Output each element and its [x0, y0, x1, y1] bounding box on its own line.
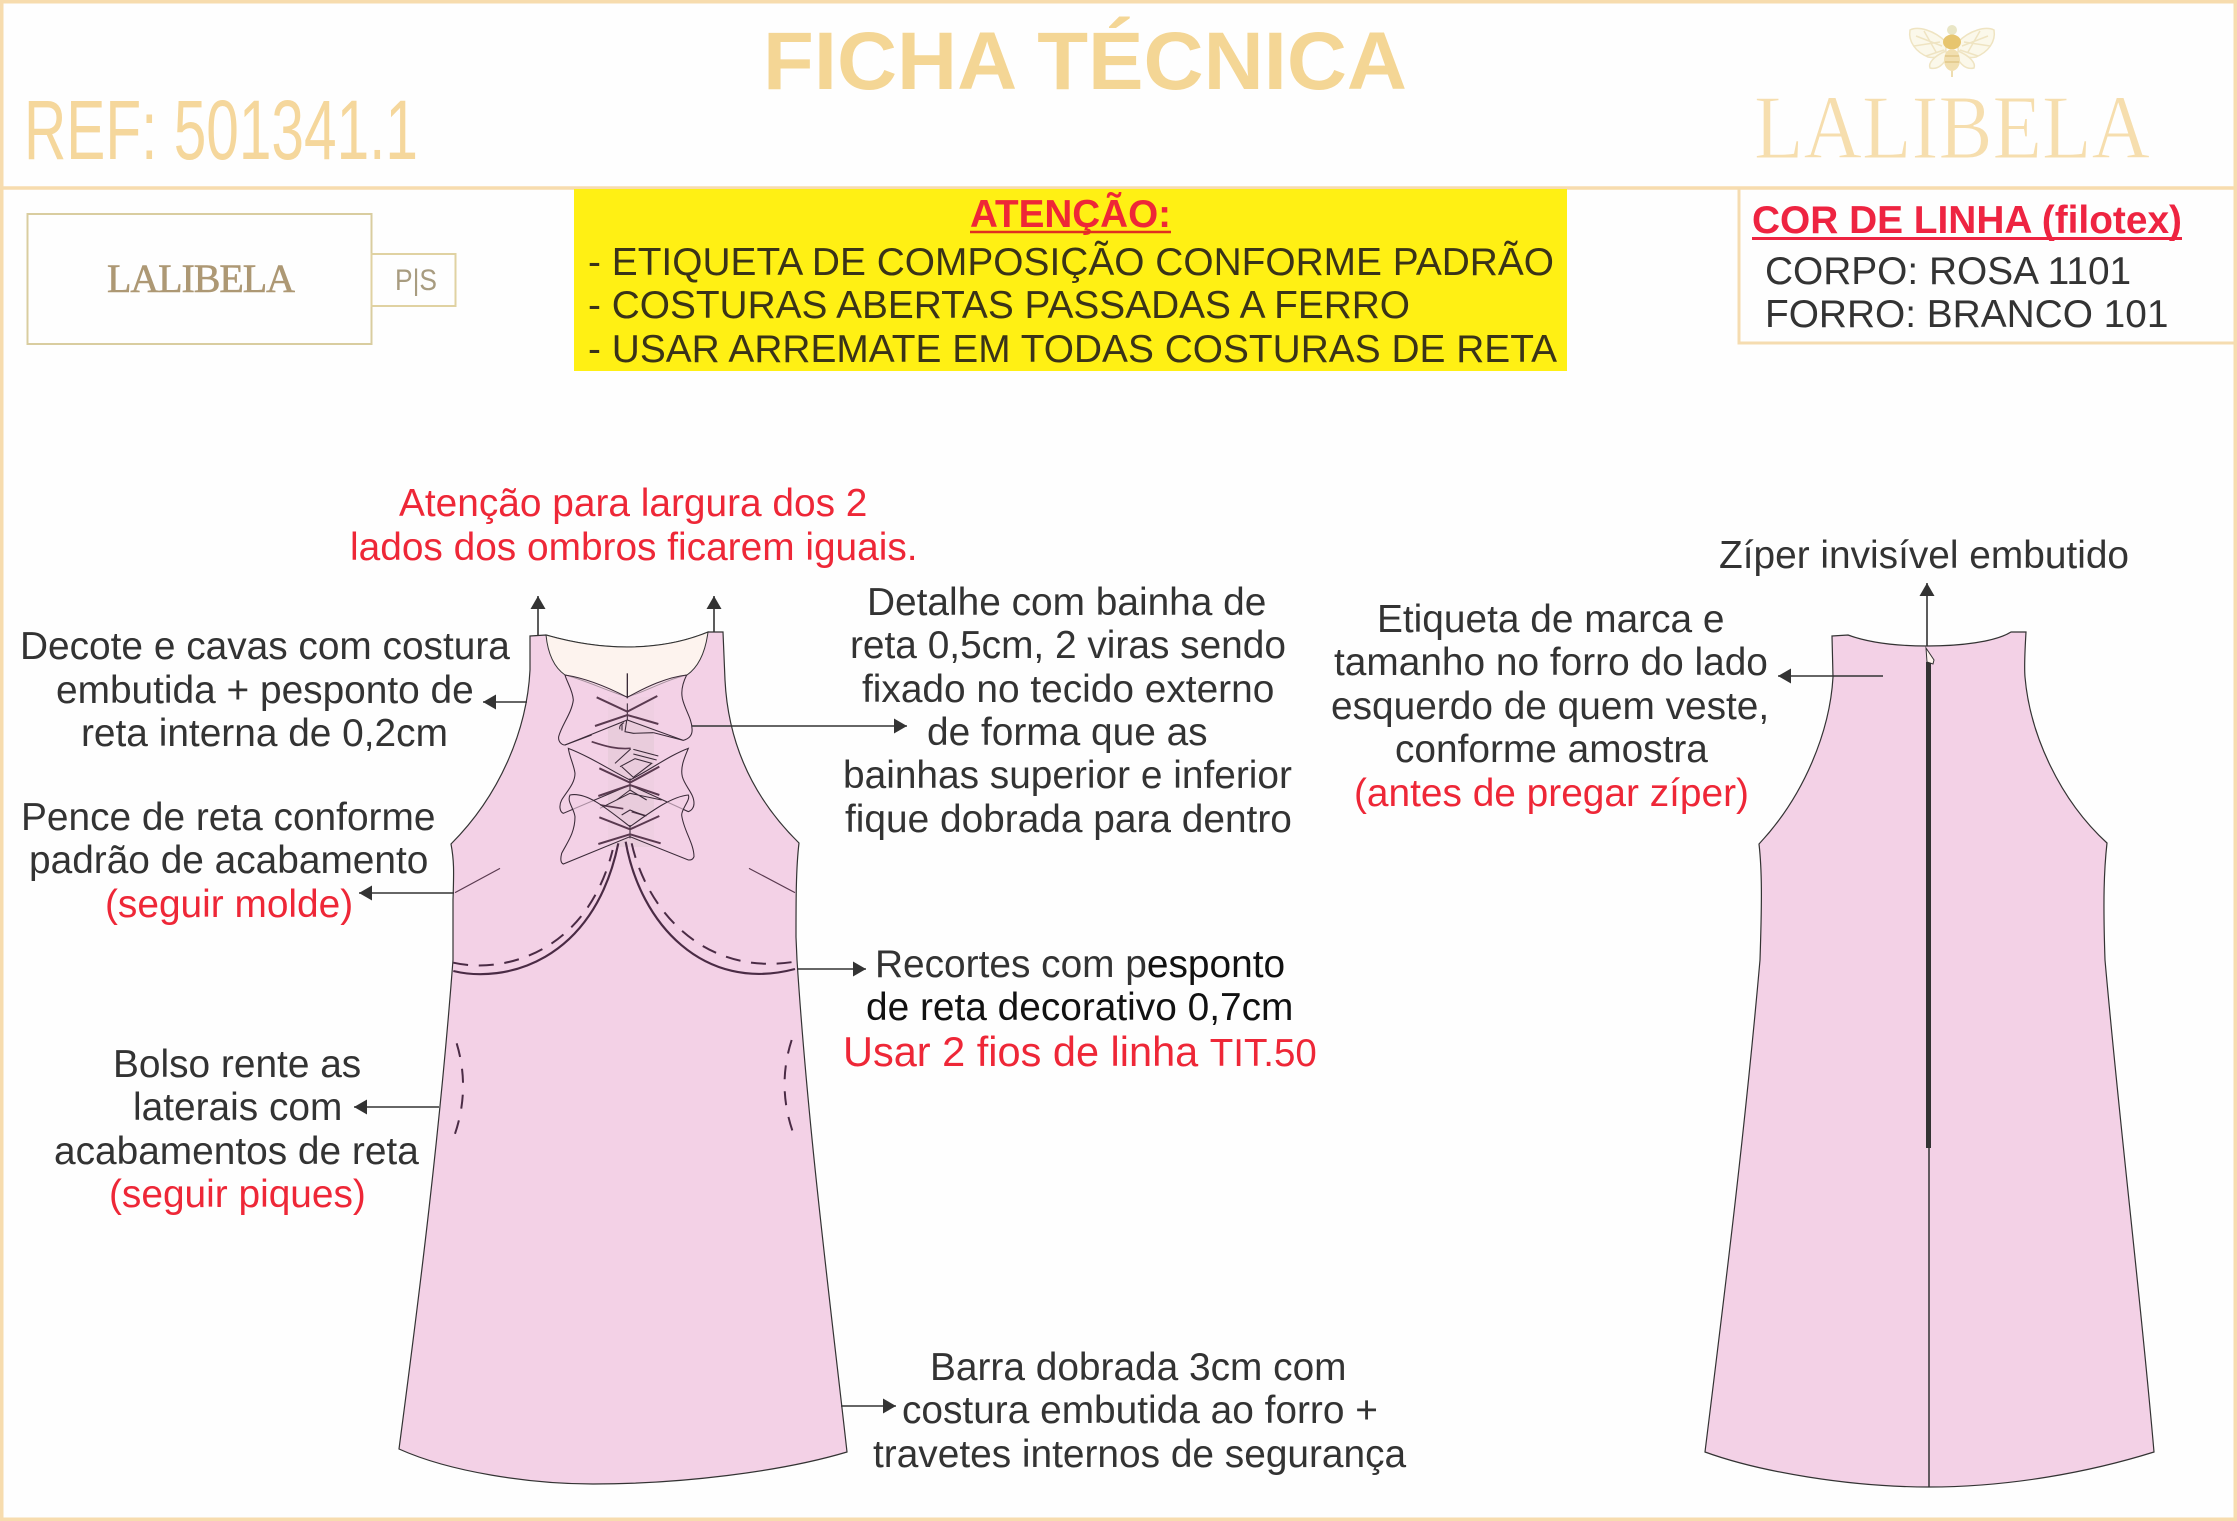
note: decorative topstitch: Usar 2 fios de linha TIT.50: [843, 1028, 1317, 1075]
note: decorative topstitch: [843, 943, 1317, 1075]
thread values: CORPO: ROSA 1101: [1765, 250, 2131, 293]
note: brand tag: Etiqueta de marca e: [1377, 598, 1725, 641]
centre shading: [608, 697, 654, 847]
note: bow detail: Detalhe com bainha de: [867, 581, 1266, 624]
back centre seam: [1928, 660, 1930, 1487]
middle bow: [560, 748, 694, 813]
note: decorative topstitch: Recortes com pesponto: [875, 943, 1285, 986]
note: pocket: Bolso rente as: [113, 1043, 361, 1086]
panel: brand label: P|S: [395, 264, 437, 297]
stitched crosses: [595, 696, 661, 844]
arrow: zipper note: [1926, 583, 1928, 646]
bow details: [559, 673, 694, 864]
note: pocket: (seguir piques): [109, 1173, 366, 1216]
note: neckline: reta interna de 0,2cm: [81, 712, 448, 755]
panel: attention notice: [574, 189, 1567, 371]
attention items: - USAR ARREMATE EM TODAS COSTURAS DE RETA: [588, 328, 1557, 371]
note: pocket: acabamentos de reta: [54, 1130, 419, 1173]
attention items: [588, 241, 1557, 371]
note: bow detail: [843, 581, 1292, 841]
front garment drawing: [399, 632, 847, 1484]
note: brand tag: [1331, 598, 1769, 815]
note: dart: padrão de acabamento: [29, 839, 428, 882]
attention heading: ATENÇÃO:: [970, 192, 1171, 236]
note: hem: travetes internos de segurança: [873, 1433, 1407, 1476]
arrow: dart note: [359, 892, 454, 894]
brand logo: LALIBELA: [1754, 77, 2150, 178]
panel: brand label: [28, 214, 456, 344]
panel: brand label: LALIBELA: [107, 256, 295, 301]
note: dart: [21, 796, 435, 926]
arrow: hem note: [841, 1405, 896, 1407]
note: bow detail: reta 0,5cm, 2 viras sendo: [850, 624, 1286, 667]
note: hem: [873, 1346, 1407, 1476]
note: hem: Barra dobrada 3cm com: [930, 1346, 1347, 1389]
note: brand tag: tamanho no forro do lado: [1334, 641, 1768, 684]
icon: bee logo: [1910, 25, 1994, 77]
arrow: bow detail note: [692, 725, 907, 727]
note: neckline: embutida + pesponto de: [56, 669, 474, 712]
note: pocket: [54, 1043, 419, 1216]
arrow: topstitch note: [797, 968, 866, 970]
note: bow detail: fixado no tecido externo: [862, 668, 1274, 711]
note: hem: costura embutida ao forro +: [902, 1389, 1378, 1432]
note: dart: Pence de reta conforme: [21, 796, 435, 839]
thread heading: COR DE LINHA (filotex): [1752, 199, 2182, 242]
note: shoulders: lados dos ombros ficarem iguais.: [350, 526, 918, 569]
thread values: FORRO: BRANCO 101: [1765, 293, 2168, 336]
note: dart: (seguir molde): [105, 883, 353, 926]
lining at neckline: [546, 632, 708, 697]
panel: thread colour: [1739, 188, 2235, 343]
bottom bow: [561, 795, 694, 864]
yoke seams: [453, 842, 795, 974]
note: zipper: Zíper invisível embutido: [1719, 534, 2129, 577]
note: neckline: [20, 625, 510, 755]
top bow: [559, 675, 692, 745]
thread values: [1765, 250, 2168, 336]
reference code: REF: 501341.1: [24, 83, 418, 177]
arrow: neckline note: [483, 701, 527, 703]
note: brand tag: conforme amostra: [1395, 728, 1708, 771]
note: brand tag: esquerdo de quem veste,: [1331, 685, 1769, 728]
dress body back: [1705, 632, 2154, 1487]
arrow: left shoulder: [537, 596, 539, 636]
note: shoulders: [350, 482, 918, 569]
note: bow detail: de forma que as: [927, 711, 1208, 754]
note: brand tag: (antes de pregar zíper): [1354, 772, 1749, 815]
note: bow detail: fique dobrada para dentro: [845, 798, 1292, 841]
attention items: - ETIQUETA DE COMPOSIÇÃO CONFORME PADRÃO: [588, 241, 1554, 284]
attention items: - COSTURAS ABERTAS PASSADAS A FERRO: [588, 284, 1410, 327]
zipper: [1926, 648, 1934, 1148]
note: bow detail: bainhas superior e inferior: [843, 754, 1292, 797]
note: pocket: laterais com: [133, 1086, 342, 1129]
dress body front: [399, 632, 847, 1484]
pockets: [454, 1040, 793, 1137]
back garment drawing: [1705, 632, 2154, 1487]
lower weave: [592, 742, 631, 749]
arrow: pocket note: [354, 1106, 439, 1108]
note: decorative topstitch: de reta decorativo 0,7cm: [866, 986, 1293, 1029]
arrow: brand tag note: [1778, 675, 1883, 677]
arrows: [354, 583, 1927, 1406]
note: shoulders: Atenção para largura dos 2: [399, 482, 867, 525]
title: FICHA TÉCNICA: [763, 16, 1407, 107]
note: neckline: Decote e cavas com costura: [20, 625, 510, 668]
arrow: right shoulder: [713, 596, 715, 632]
